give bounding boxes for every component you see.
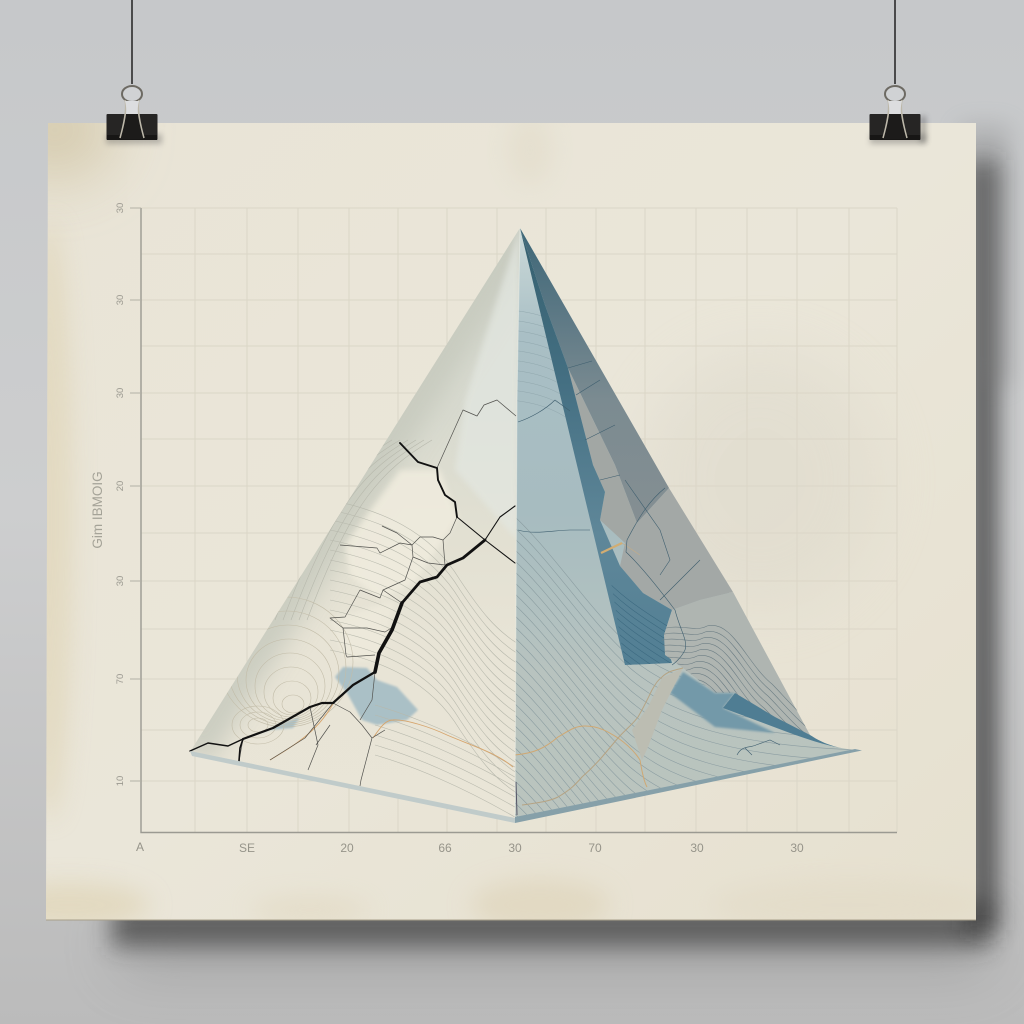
y axis tick labels: 30 [115, 388, 126, 398]
veins on right face [515, 543, 683, 805]
fine cracks on right face [516, 361, 780, 815]
x axis tick labels [136, 840, 804, 855]
clip shadows [106, 116, 926, 144]
y axis tick labels: 10 [115, 776, 126, 786]
left hanging wire [131, 0, 133, 84]
pyramid [189, 228, 862, 823]
fine cracks [239, 400, 516, 786]
y axis tick labels: 30 [115, 576, 126, 586]
x axis tick labels: 30 [690, 841, 704, 855]
x axis tick labels: A [136, 840, 144, 854]
y axis tick labels [115, 203, 126, 786]
paper drop shadow [112, 125, 1010, 970]
wavy region upper right [662, 592, 810, 735]
y axis tick labels: 30 [115, 203, 126, 213]
dark band [520, 228, 672, 665]
right face [514, 228, 852, 818]
blue lower wedge [670, 672, 775, 733]
pyramid base edge, right [515, 749, 862, 823]
right hanging wire [894, 0, 896, 84]
tan stripe [545, 305, 637, 543]
paper sheet [46, 123, 976, 920]
left contour lines [219, 440, 520, 820]
dark gray facet [520, 228, 669, 523]
dark lower wedge [723, 693, 858, 750]
y axis title: Gim IBMOIG [90, 471, 105, 549]
blue stains [257, 667, 418, 737]
left face [190, 228, 520, 822]
chart axes with tick marks [130, 208, 897, 832]
center seam [515, 228, 520, 820]
x axis tick labels: 30 [790, 841, 804, 855]
x axis tick labels: 66 [438, 841, 452, 855]
x axis tick labels: 20 [340, 841, 354, 855]
band contour lines [612, 585, 671, 665]
x axis tick labels: SE [239, 841, 255, 855]
right contour lines [515, 310, 852, 816]
y axis tick labels: 30 [115, 295, 126, 305]
y axis tick labels: 70 [115, 674, 126, 684]
x axis tick labels: 30 [508, 841, 522, 855]
pyramid base edge, left [190, 751, 515, 823]
main black fissure [190, 443, 515, 761]
tan curved fin [632, 668, 683, 760]
left binder clip [106, 86, 158, 140]
right binder clip [870, 86, 920, 140]
chart grid [141, 208, 897, 832]
lighter gray lower facet [620, 488, 733, 610]
y axis tick labels: 20 [115, 481, 126, 491]
orange vein, left [270, 700, 513, 767]
x axis tick labels: 70 [588, 841, 602, 855]
